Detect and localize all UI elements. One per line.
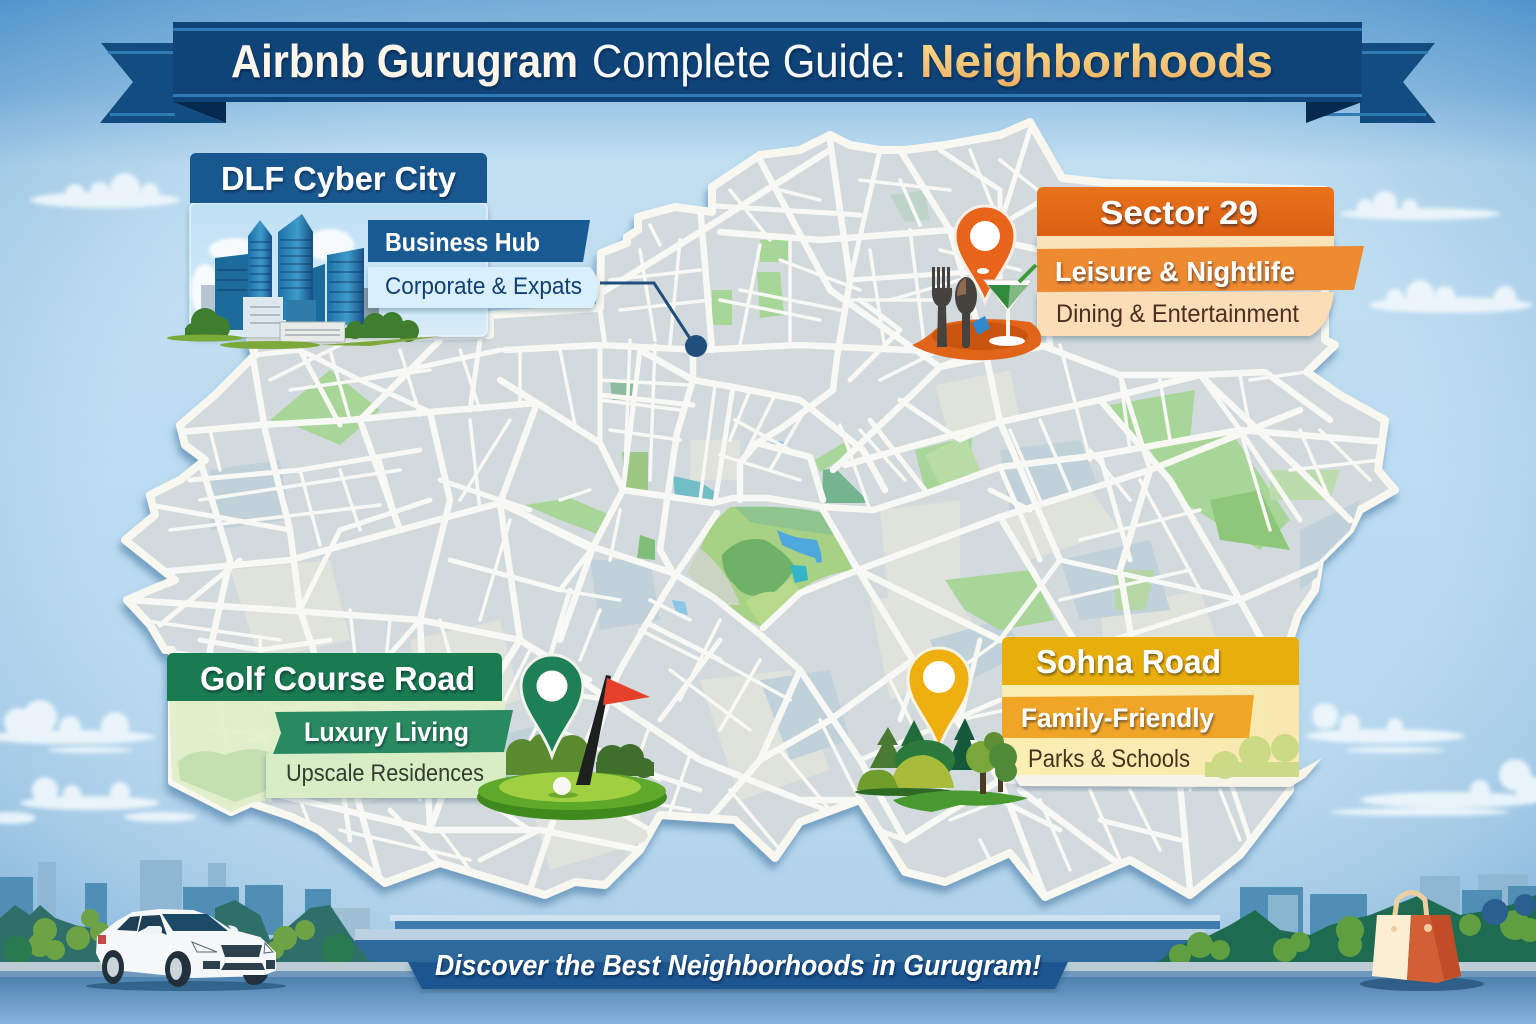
map base sheet bbox=[125, 122, 1395, 897]
left ribbon tail bbox=[100, 43, 226, 123]
panel: Sohna Road bbox=[855, 637, 1322, 812]
pill: Corporate & Expats bbox=[368, 267, 599, 308]
title text: Complete Guide: bbox=[592, 35, 906, 87]
heading: Sohna Road: Sohna Road bbox=[1036, 643, 1221, 680]
ribbon: Family-Friendly bbox=[1002, 695, 1254, 738]
subtext box: Upscale Residences bbox=[266, 753, 506, 798]
icon: golf green with flag bbox=[477, 675, 667, 820]
icon: shopping bag bbox=[1360, 892, 1484, 991]
icon: yellow location pin bbox=[908, 648, 970, 749]
road surface bbox=[0, 977, 1536, 1024]
ribbon: Luxury Living: Luxury Living bbox=[304, 717, 469, 747]
panel body bbox=[1002, 685, 1299, 775]
icon: dining tray with fork, spoon and cocktail bbox=[912, 265, 1041, 360]
right ribbon tail bbox=[1306, 43, 1436, 123]
scenery wash bbox=[178, 749, 268, 802]
subtext: Parks & Schools: Parks & Schools bbox=[1028, 745, 1190, 773]
heading: Golf Course Road: Golf Course Road bbox=[200, 660, 475, 697]
minor streets bbox=[140, 150, 1380, 880]
icon: orange location pin bbox=[955, 206, 1015, 302]
footer ribbon bbox=[408, 950, 1068, 989]
tagline: Discover the Best Neighborhoods in Gurugram! bbox=[435, 950, 1041, 982]
footer scene bbox=[0, 860, 1536, 1024]
panel header bbox=[167, 653, 502, 701]
panel header bbox=[190, 153, 487, 203]
bushes right bbox=[1155, 894, 1536, 966]
icon: white car bbox=[86, 910, 286, 991]
icon: park with trees bbox=[855, 718, 1028, 812]
ribbon: Leisure & Nightlife bbox=[1037, 246, 1364, 292]
panel header bbox=[1002, 637, 1299, 685]
road stripes in the distance bbox=[355, 915, 1220, 966]
panel header bbox=[1037, 187, 1334, 236]
clouds bbox=[0, 173, 1536, 824]
panel: Sector 29 bbox=[912, 187, 1364, 360]
ribbon: Business Hub: Business Hub bbox=[385, 227, 540, 257]
pill: Corporate & Expats: Corporate & Expats bbox=[385, 273, 582, 300]
title text: Neighborhoods bbox=[920, 35, 1273, 87]
scenery wash bbox=[1205, 734, 1299, 779]
panel body bbox=[169, 700, 505, 812]
heading: Sector 29: Sector 29 bbox=[1100, 194, 1258, 231]
scroll edge bbox=[1010, 758, 1322, 787]
subtext: Dining & Entertainment: Dining & Entertainment bbox=[1056, 300, 1299, 328]
central park bbox=[687, 507, 853, 628]
panel body bbox=[1037, 236, 1334, 336]
panel: Golf Course Road bbox=[167, 653, 667, 820]
banner body bbox=[173, 22, 1362, 102]
panel: DLF Cyber City bbox=[167, 153, 599, 349]
title text bbox=[231, 35, 1273, 87]
map of Gurugram bbox=[125, 122, 1395, 897]
bushes left bbox=[0, 900, 372, 966]
title banner bbox=[100, 22, 1436, 123]
ribbon: Business Hub bbox=[368, 220, 590, 262]
icon: green location pin bbox=[521, 655, 583, 756]
ribbon: Family-Friendly: Family-Friendly bbox=[1021, 703, 1214, 733]
secondary roads bbox=[150, 130, 1300, 863]
ribbon: Luxury Living bbox=[273, 710, 513, 754]
ribbon: Leisure & Nightlife: Leisure & Nightlife bbox=[1055, 256, 1295, 287]
skyline bbox=[0, 860, 1536, 954]
sidewalk bbox=[0, 962, 1536, 979]
subtext box: Upscale Residences: Upscale Residences bbox=[286, 760, 484, 787]
panel body bbox=[190, 203, 487, 336]
leader line to DLF Cyber City location bbox=[600, 283, 707, 357]
main roads bbox=[127, 140, 1385, 897]
map land use patches bbox=[127, 130, 1385, 897]
title text: Airbnb Gurugram bbox=[231, 35, 578, 87]
icon: office towers bbox=[167, 214, 442, 349]
heading: DLF Cyber City: DLF Cyber City bbox=[221, 160, 457, 197]
